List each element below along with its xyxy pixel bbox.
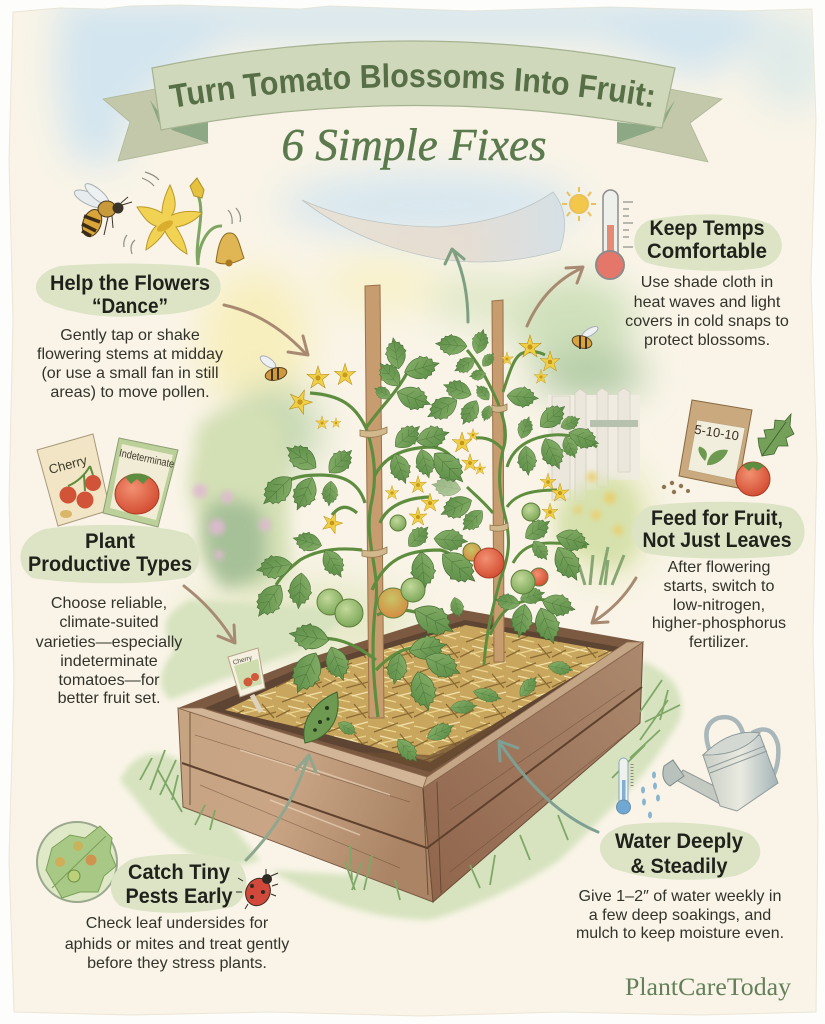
body text: covers in cold snaps to [625, 312, 789, 330]
icon: indeterminate seed packet: Indeterminate [118, 447, 175, 471]
stems [276, 373, 460, 717]
raised garden bed [178, 610, 643, 902]
garden yellow flowers [560, 472, 638, 585]
blossoms [452, 335, 569, 519]
heading pill [20, 525, 199, 583]
body text: Check leaf undersides for [86, 914, 269, 932]
body text: protect blossoms. [644, 331, 770, 349]
tomatoes [463, 503, 548, 594]
logo text: PlantCareToday [625, 974, 792, 1001]
bed back walls [178, 610, 643, 788]
icon: fertilizer bag: 5-10-10 [693, 422, 740, 443]
ground washes [120, 600, 682, 920]
spotted leaf on bed [304, 692, 338, 743]
arrow: to right plant [592, 578, 636, 623]
bee near right plant [571, 324, 600, 350]
heading: “Dance” [92, 295, 168, 318]
heading: Comfortable [647, 240, 767, 263]
body text: Choose reliable, [51, 594, 167, 612]
icon: bee [72, 181, 132, 239]
body text: starts, switch to [664, 577, 774, 595]
title banner [102, 40, 723, 170]
body text: flowering stems at midday [37, 345, 224, 363]
body text: (or use a small fan in still [41, 364, 219, 382]
icon: fertilizer bag [662, 400, 752, 494]
body text: indeterminate [60, 652, 158, 670]
body text: areas) to move pollen. [50, 383, 210, 401]
title line 1: Turn Tomato Blossoms Into Fruit: [168, 63, 654, 107]
stake [492, 300, 504, 662]
icon: watering can [663, 717, 778, 811]
right face [423, 642, 643, 902]
tomato plant: left [248, 285, 484, 718]
shade cloth [302, 192, 565, 262]
heading: Keep Temps [650, 217, 764, 240]
ribbon tails [103, 88, 722, 162]
heading: Productive Types [28, 553, 192, 576]
heading: Plant [85, 530, 135, 553]
heading pill [600, 822, 760, 880]
blossoms [286, 363, 439, 535]
body text: varieties—especially [36, 633, 183, 651]
heading: Pests Early [126, 885, 233, 908]
heading: Feed for Fruit, [651, 507, 783, 530]
icon: yellow flower with bell [124, 172, 244, 266]
body text: low-nitrogen, [673, 596, 765, 614]
stems [467, 350, 597, 665]
arrow: to shade cloth [445, 249, 468, 322]
icon: leaf [758, 414, 794, 456]
body text: better fruit set. [58, 689, 160, 707]
grass around bed [140, 680, 680, 900]
heading: Water Deeply [615, 830, 743, 853]
section: keep temps comfortable [562, 187, 789, 349]
arrow: to bed [499, 741, 598, 832]
plant tag: Cherry [232, 654, 254, 667]
heading pill [632, 502, 805, 559]
body text: before they stress plants. [87, 954, 267, 972]
background tree and fence [548, 388, 640, 501]
leaves in mulch [335, 659, 574, 767]
title line 2: 6 Simple Fixes [282, 120, 546, 170]
body text: tomatoes—for [58, 671, 160, 689]
icon: ladybug [236, 869, 278, 910]
leaflets [422, 327, 602, 648]
icon: water drops [641, 772, 660, 818]
heading: Help the Flowers [50, 272, 210, 295]
icon: thermometer [596, 190, 633, 279]
ribbon body [152, 41, 675, 130]
heading: & Steadily [630, 855, 728, 878]
section: catch tiny pests early [37, 822, 290, 972]
heading: Catch Tiny [128, 861, 230, 884]
icon: cherry seed packet: Cherry [47, 452, 89, 477]
small bee near flowers [258, 354, 288, 383]
heading: Not Just Leaves [642, 529, 792, 552]
tomato plant: right [422, 300, 602, 665]
icon: tomato [736, 462, 770, 496]
body text: Use shade cloth in [641, 273, 773, 291]
heading pill [36, 264, 221, 317]
icon: cherry seed packet [37, 434, 110, 526]
arrow: to plant tag [184, 586, 235, 643]
straw mulch [225, 625, 615, 762]
arrow: to flowers [224, 305, 308, 355]
plant tag [228, 648, 265, 712]
icon: magnified leaf [37, 822, 117, 902]
bed rim [178, 708, 427, 788]
soil under near edge [360, 712, 520, 772]
body text: fertilizer. [689, 633, 749, 651]
section: plant productive types [20, 434, 199, 707]
body text: heat waves and light [634, 293, 781, 311]
tomatoes [317, 515, 425, 627]
body text: Gently tap or shake [60, 326, 200, 344]
section: feed for fruit [632, 400, 805, 651]
body text: After flowering [668, 558, 770, 576]
icon: sun [562, 187, 596, 221]
body text: a few deep soakings, and [589, 906, 771, 924]
ties [360, 427, 387, 557]
garden shrub with pink flowers [189, 405, 290, 590]
body text: climate-suited [59, 613, 159, 631]
body text: higher-phosphorus [652, 614, 786, 632]
leaflets [248, 336, 484, 714]
ties [490, 404, 508, 531]
arrow: to spotted leaf [246, 755, 316, 860]
stake [365, 285, 384, 718]
body text: mulch to keep moisture even. [576, 924, 784, 942]
arrow: from thermometer [527, 267, 583, 326]
heading pill [111, 854, 246, 913]
body text: aphids or mites and treat gently [65, 935, 290, 953]
left face [178, 708, 433, 902]
section: water deeply [576, 717, 784, 942]
icon: blue thermometer [616, 758, 632, 814]
body text: Give 1–2″ of water weekly in [578, 887, 782, 905]
section: help the flowers dance [36, 172, 244, 401]
icon: indeterminate seed packet [103, 438, 178, 527]
heading pill [634, 214, 782, 271]
